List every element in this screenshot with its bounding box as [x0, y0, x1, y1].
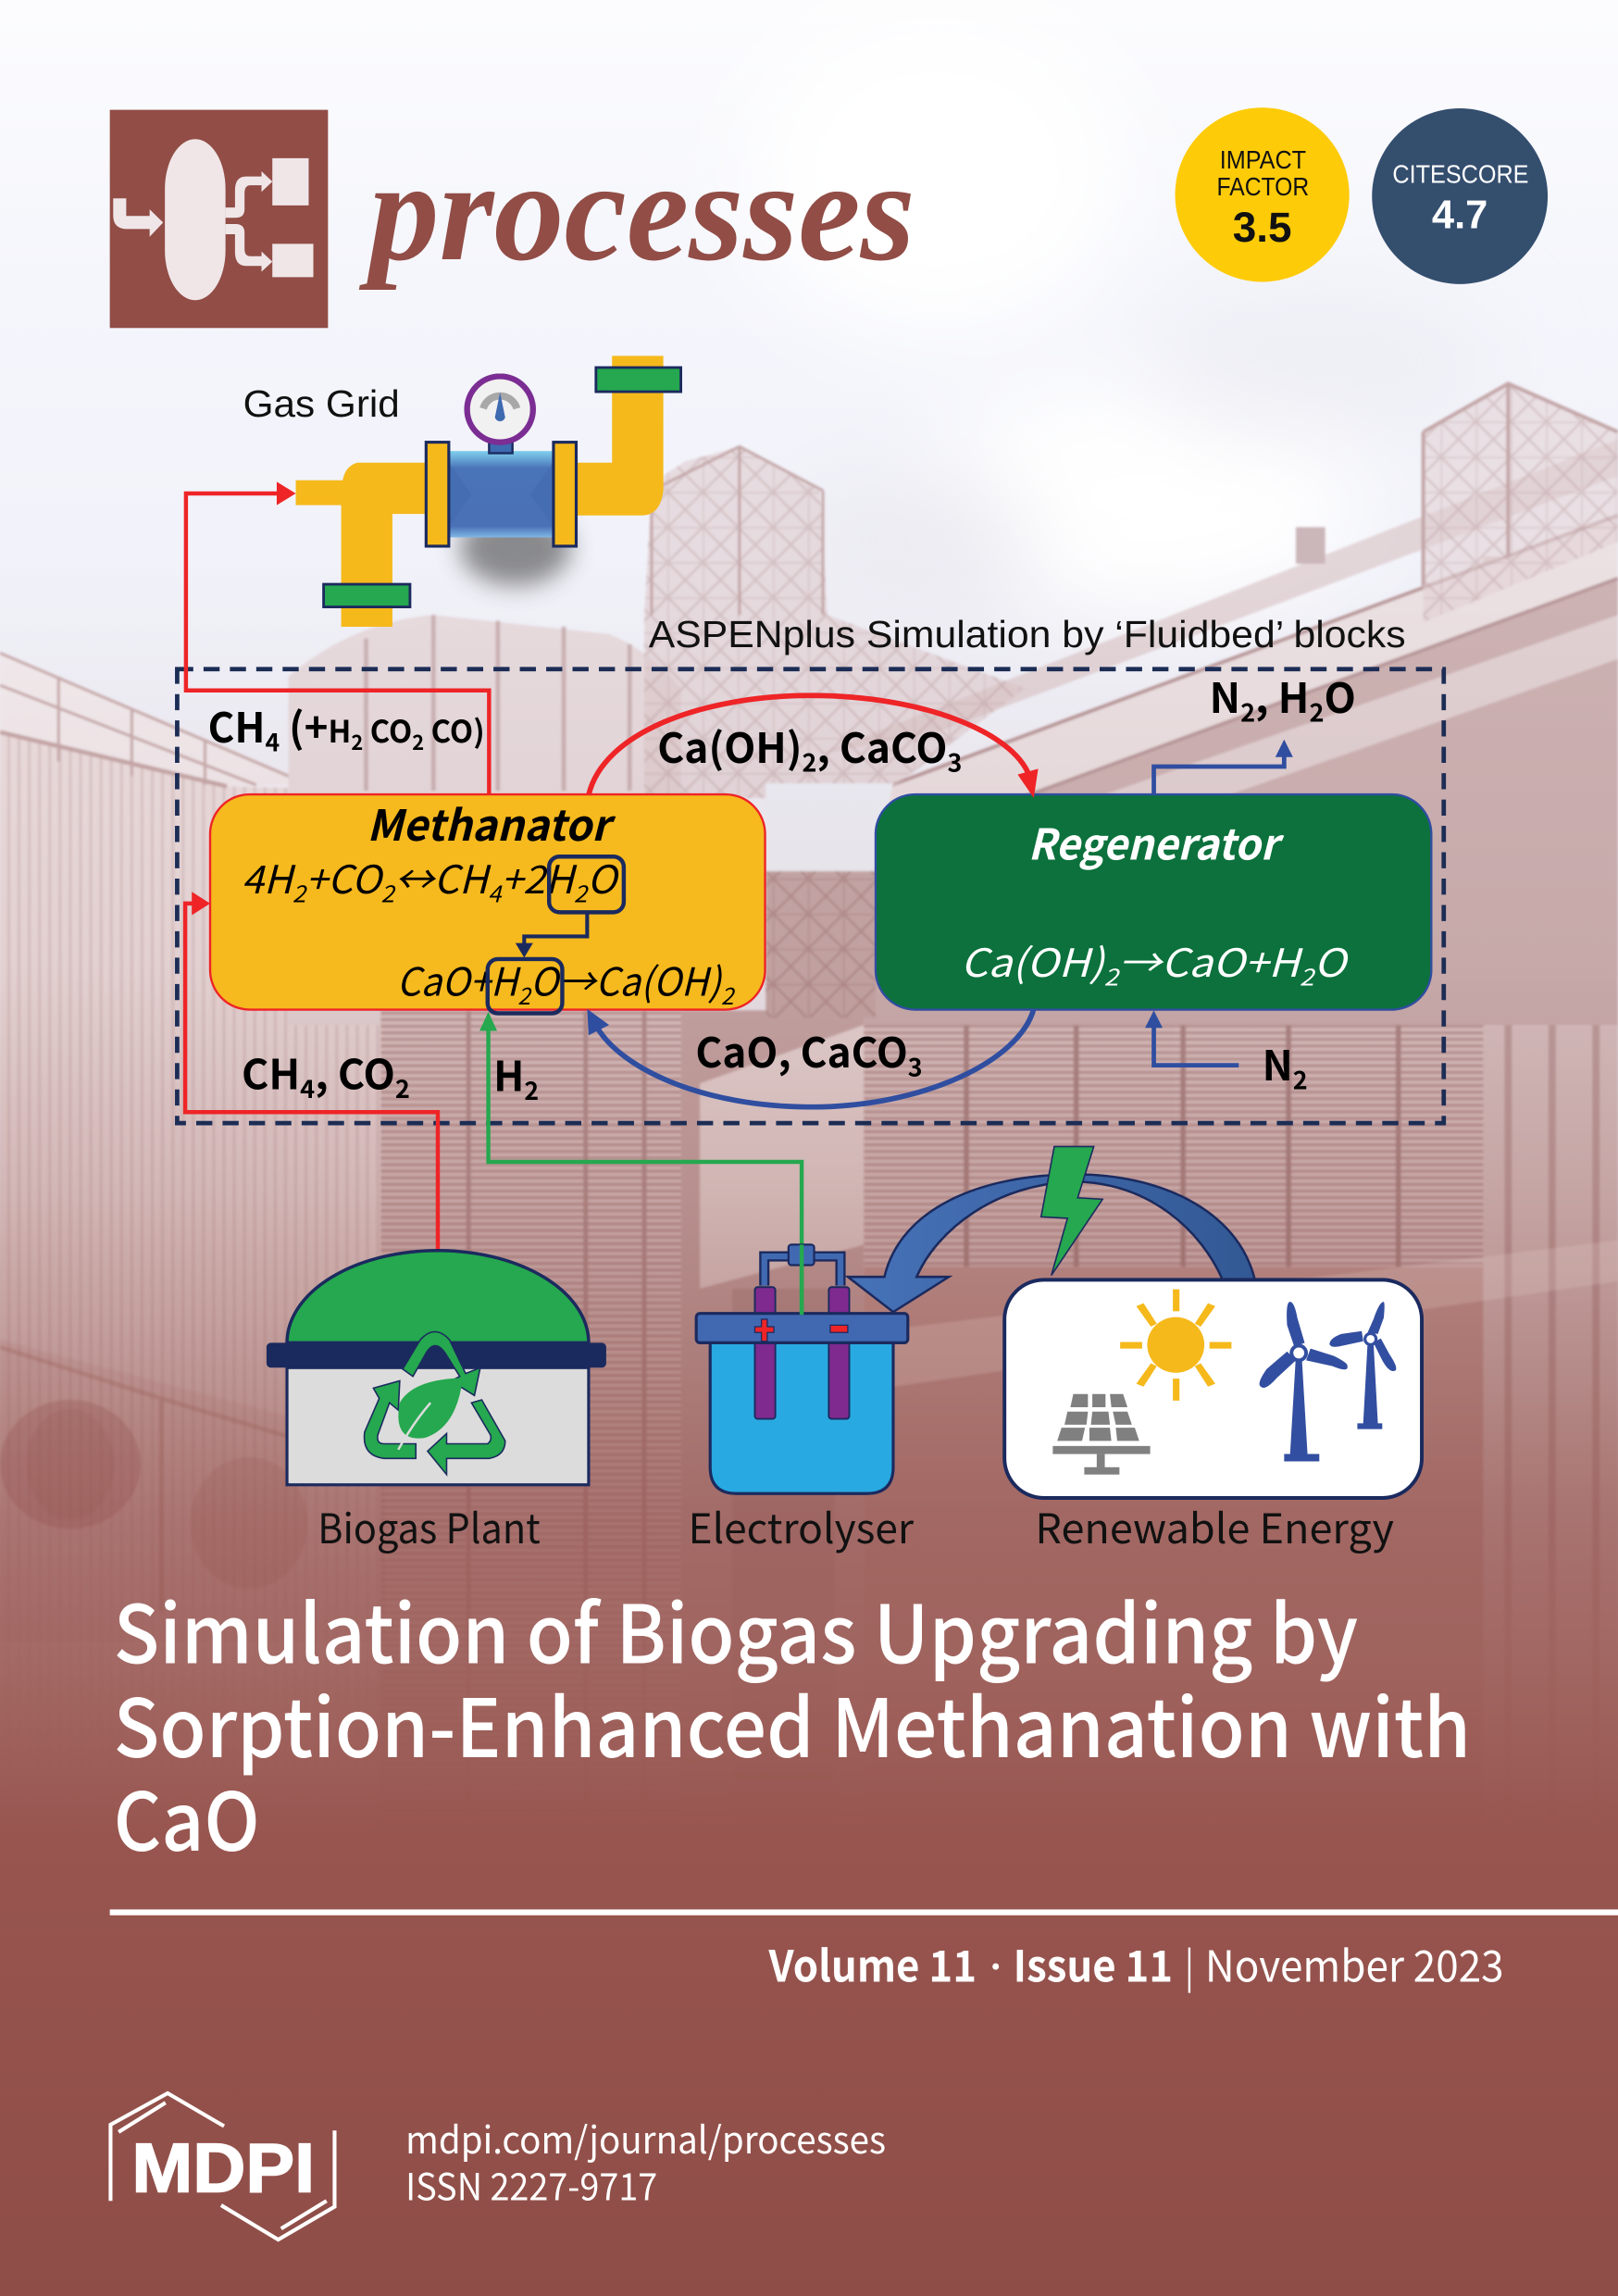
curved energy arrow — [848, 1174, 1255, 1312]
photo: lower machinery over gradient — [0, 1241, 1618, 1640]
blue arc arrow regenerator to methanator — [587, 1009, 1034, 1107]
title: Sorption-Enhanced Methanation with — [114, 1665, 1471, 1781]
regenerator reaction: 2 — [1300, 959, 1316, 992]
water highlight box top — [549, 856, 624, 912]
volume and issue line: Volume 11 — [768, 1933, 977, 1995]
methanator reaction 2: 2 — [517, 979, 532, 1012]
red arc arrow methanator to regenerator — [589, 695, 1039, 798]
label ch4 product: H — [329, 706, 351, 752]
logo arrows — [113, 171, 272, 272]
label biogas plant: Biogas Plant — [317, 1496, 541, 1555]
panel: regenerator — [876, 794, 1431, 1010]
recycling symbol — [365, 1331, 505, 1475]
methanator reaction 1: 4H — [242, 849, 292, 905]
aspen label: ASPENplus Simulation by ‘Fluidbed’ blocks — [649, 613, 1406, 655]
regenerator reaction: 2 — [1104, 959, 1120, 992]
water highlight box bottom — [488, 959, 562, 1013]
photo: upper right tower — [1424, 383, 1618, 622]
methanator reaction 2: 2 — [721, 979, 735, 1012]
photo: tower between silos — [681, 1010, 864, 1860]
label ch4 product: 4 — [265, 722, 280, 758]
water transfer arrow — [516, 912, 587, 957]
meter body — [448, 451, 554, 537]
photo: central silo — [289, 615, 681, 1025]
regenerator title: Regenerator — [1027, 811, 1285, 872]
title: Simulation of Biogas Upgrading by — [114, 1571, 1358, 1688]
methanator reaction 1: +CO — [305, 849, 385, 905]
icon: small wind turbine — [1329, 1302, 1396, 1429]
icon: lightning bolt — [1041, 1146, 1102, 1276]
blue nitrogen inlet arrow — [1145, 1010, 1238, 1066]
icon: sun — [1120, 1290, 1231, 1401]
impact factor badge — [1175, 107, 1350, 281]
methanator reaction 1: O — [587, 849, 620, 905]
connector — [765, 1256, 840, 1286]
label off-gas: , H — [1255, 666, 1309, 725]
title — [114, 1571, 1471, 1875]
mdpi logo — [110, 2093, 334, 2240]
methanator reaction 1: ↔CH — [394, 849, 492, 905]
methanator title: Methanator — [367, 792, 616, 854]
label solid transfer blue: 3 — [908, 1048, 923, 1083]
logo output blocks — [272, 158, 314, 277]
label electrolyser: Electrolyser — [688, 1496, 915, 1555]
journal url and issn — [405, 2110, 886, 2211]
methanator reaction 1: 2 — [574, 876, 589, 909]
label solid transfer blue: CaO, CaCO — [695, 1020, 909, 1079]
citescore badge: 4.7 — [1432, 193, 1487, 238]
photo: left building — [0, 732, 383, 1860]
methanator reaction 1: +2H — [501, 849, 577, 905]
hydrogen line in front of electrolyser — [801, 1244, 803, 1315]
flange top — [596, 368, 681, 392]
label off-gas: 2 — [1309, 693, 1324, 730]
methanator reaction 1: 4 — [488, 876, 503, 909]
lid — [696, 1314, 908, 1342]
citescore badge — [1372, 108, 1548, 284]
citescore badge: CITESCORE — [1392, 160, 1529, 189]
icon: large wind turbine — [1260, 1302, 1348, 1461]
red product line to gas grid — [186, 481, 489, 795]
label biogas feed: , CO — [315, 1042, 395, 1102]
blue off-gas arrow — [1154, 740, 1293, 795]
photo: right column — [1483, 556, 1618, 1860]
volume and issue line: November 2023 — [1205, 1933, 1504, 1995]
methanator reaction 2: CaO+H — [397, 952, 522, 1008]
volume and issue line: Issue 11 — [1014, 1933, 1173, 1995]
icon: biogas plant — [267, 1251, 606, 1485]
label nitrogen: N — [1263, 1033, 1293, 1092]
label off-gas: O — [1324, 666, 1356, 725]
label ch4 product: CO — [363, 706, 412, 752]
volume and issue line — [768, 1933, 1504, 1995]
tank base — [287, 1367, 589, 1485]
electrodes — [754, 1287, 776, 1419]
journal url and issn: ISSN 2227-9717 — [405, 2156, 657, 2211]
photo: right silos — [864, 1010, 1176, 1267]
journal name: processes — [358, 131, 915, 291]
label ch4 product: (+ — [280, 695, 329, 755]
label ch4 product: CH — [208, 695, 266, 755]
label ch4 product: 2 — [412, 727, 424, 756]
label biogas feed: 2 — [395, 1069, 410, 1105]
panel: renewable energy box — [1004, 1279, 1422, 1498]
methanator reaction 1: 2 — [292, 876, 307, 909]
label solid transfer red: Ca(OH) — [657, 716, 803, 775]
regenerator reaction: →CaO+H — [1118, 932, 1303, 989]
label nitrogen: 2 — [1293, 1061, 1308, 1097]
regenerator reaction: O — [1313, 932, 1350, 989]
label solid transfer red: 2 — [803, 743, 816, 780]
label ch4 product: CO) — [424, 706, 485, 752]
yellow pipe — [296, 463, 428, 627]
plus and minus — [754, 1319, 774, 1341]
divider rule — [110, 1909, 1618, 1915]
label solid transfer red: , CaCO — [816, 716, 947, 775]
photo: sky gap and truss — [765, 783, 893, 879]
label renewable energy: Renewable Energy — [1035, 1496, 1394, 1555]
photo: lattice tower — [644, 446, 1025, 798]
panel: methanator — [210, 792, 765, 1013]
label off-gas: 2 — [1240, 693, 1255, 730]
gauge — [489, 439, 513, 454]
icon: electrolyser — [696, 1244, 908, 1493]
label biogas feed: CH — [242, 1042, 300, 1102]
label hydrogen: H — [493, 1043, 525, 1103]
journal url and issn: mdpi.com/journal/processes — [405, 2110, 886, 2165]
green dome — [287, 1251, 589, 1342]
tank — [710, 1340, 893, 1493]
label off-gas: N — [1210, 666, 1240, 725]
label hydrogen: 2 — [524, 1071, 539, 1107]
green hydrogen line — [479, 1012, 802, 1315]
regenerator reaction: Ca(OH) — [961, 932, 1090, 989]
label biogas feed: 4 — [300, 1069, 315, 1105]
impact factor badge: IMPACT — [1220, 145, 1306, 174]
mdpi logo: MDPI — [131, 2129, 315, 2207]
flange bottom — [324, 584, 410, 607]
red biogas feed line — [185, 892, 438, 1249]
photo: roof bands — [864, 579, 1618, 1025]
simulation dashed box — [177, 669, 1444, 1123]
label ch4 product: 2 — [351, 727, 363, 756]
journal logo square — [110, 110, 328, 328]
impact factor badge: FACTOR — [1217, 172, 1309, 201]
title: CaO — [114, 1758, 260, 1875]
methanator reaction 2: O→Ca(OH) — [530, 952, 723, 1008]
gas grid pipe with meter and gauge — [296, 356, 681, 627]
label solid transfer red: 3 — [947, 743, 962, 780]
icon: solar panel — [1052, 1394, 1151, 1475]
impact factor badge: 3.5 — [1233, 203, 1291, 251]
navy band — [267, 1342, 606, 1367]
methanator reaction 1: 2 — [381, 876, 396, 909]
logo vessel — [165, 139, 226, 300]
gas grid label: Gas Grid — [243, 382, 400, 425]
